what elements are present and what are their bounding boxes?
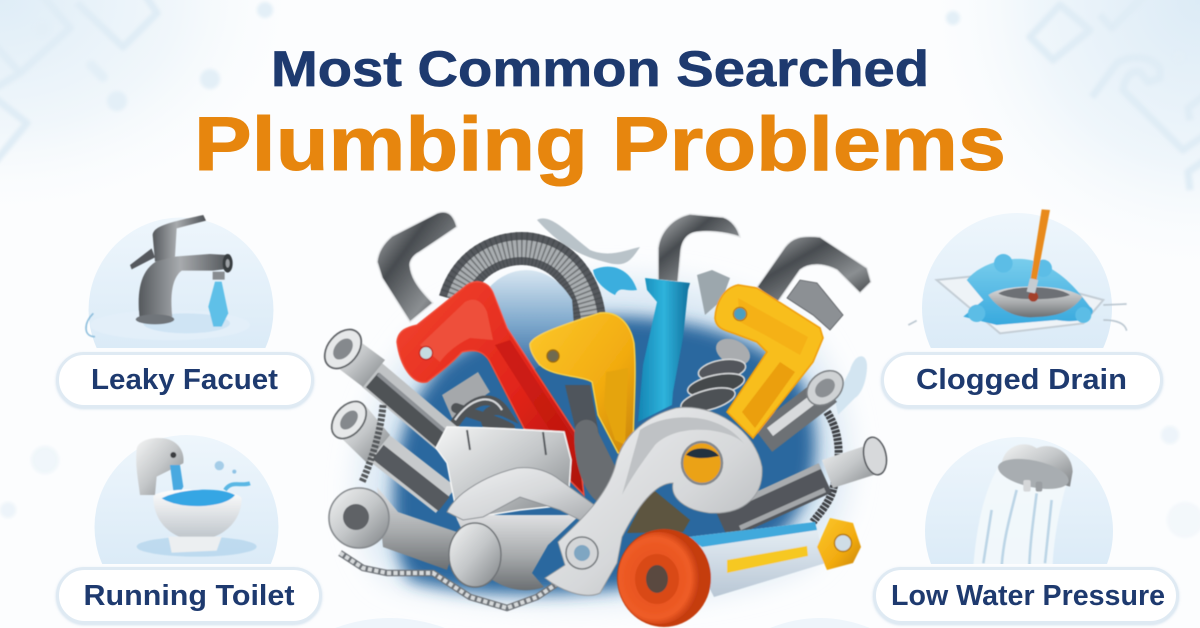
water splashes top: [537, 218, 640, 264]
disc: [925, 437, 1113, 564]
orange nut end: [817, 518, 861, 570]
braided cable right: [813, 412, 839, 522]
disc: [94, 435, 278, 564]
disc: [922, 213, 1112, 348]
right foreground pipe: [722, 435, 890, 528]
panel: leaky faucet: [58, 215, 312, 406]
label pill: Leaky Facuet: [91, 364, 278, 396]
white-blue handle: [687, 522, 826, 597]
orange plunger disc: [617, 529, 711, 627]
right silver wrench jaw: [757, 236, 871, 303]
panel: running toilet: [58, 435, 320, 622]
label pill: [874, 568, 1178, 622]
title line 1: Most Common Searched: [271, 41, 929, 97]
rod under yellow wrench: [565, 385, 600, 440]
left pipe lower: [325, 395, 446, 504]
middle-left spring: [452, 400, 510, 430]
chain: [340, 553, 573, 608]
red wrench: [397, 282, 584, 495]
label pill: Running Toilet: [84, 580, 295, 612]
decorative discs peeking at bottom: [335, 618, 870, 628]
icon: shower head: [973, 444, 1073, 567]
silver jaw behind red wrench: [377, 212, 457, 322]
label pill: Low Water Pressure: [891, 580, 1165, 612]
label pill: [58, 354, 312, 406]
icon: faucet: [86, 215, 250, 340]
toilet tank: [436, 427, 571, 520]
label pill: [882, 354, 1162, 406]
yellow wrench right: [715, 285, 823, 438]
light inside arc: [487, 270, 575, 380]
silver body centre-bottom: [447, 468, 597, 590]
left pipe upper: [317, 323, 470, 462]
middle yellow wrench: [530, 313, 635, 455]
silver hook on blue tool: [658, 214, 740, 282]
brown parts under wrench: [627, 487, 690, 533]
label pill: [58, 568, 320, 622]
panel: clogged drain: [882, 209, 1162, 406]
disc: [88, 218, 274, 348]
label pill: Clogged Drain: [916, 364, 1127, 396]
title line 2: Plumbing Problems: [194, 102, 1006, 187]
right back pipe: [763, 364, 850, 440]
chrome under red wrench: [442, 372, 490, 418]
braided cable left: [362, 405, 383, 482]
small spray right of blue handle: [697, 270, 730, 315]
spring centre right: [678, 334, 754, 417]
blue handle: [638, 278, 690, 422]
corrugated hose: [455, 248, 590, 325]
soft halo: [358, 279, 848, 601]
title: [194, 41, 1006, 187]
dark pliers centre: [574, 420, 622, 502]
water drop right: [835, 356, 867, 415]
icon: toilet: [136, 438, 257, 557]
blue backdrop: [393, 316, 816, 594]
panel: low water pressure: [874, 437, 1178, 625]
central illustration: pile of plumbing tools: [317, 212, 890, 627]
ring spanner bottom-left: [329, 487, 501, 587]
icon: clogged drain: [908, 209, 1127, 333]
open-end wrench centre: [545, 407, 762, 595]
